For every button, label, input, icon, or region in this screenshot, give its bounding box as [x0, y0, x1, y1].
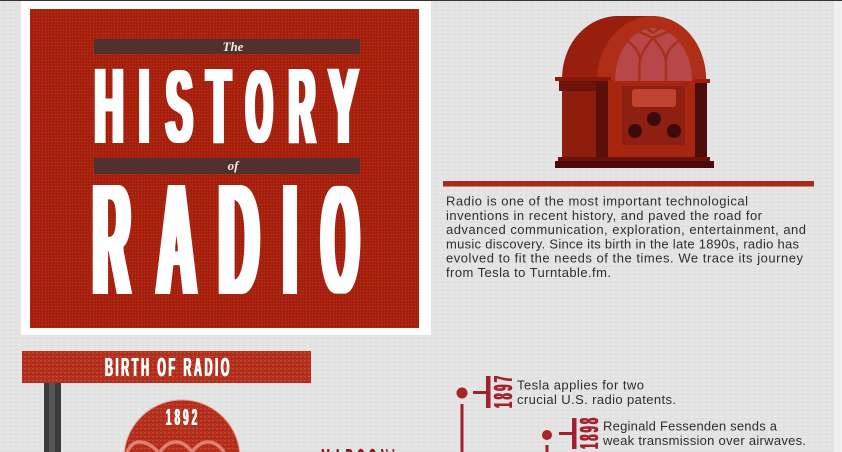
section heading: Birth of Radio	[22, 351, 311, 383]
circle: 1892: 1892	[166, 404, 197, 430]
icon: radio wave	[127, 442, 224, 452]
title word: HISTORY: I	[139, 46, 149, 166]
title bar: of	[94, 158, 360, 174]
title word: RADIO: O	[322, 152, 358, 328]
timeline event: 1897: 1897	[490, 376, 519, 408]
radio knobs	[628, 112, 681, 138]
title word: HISTORY: T	[207, 47, 230, 167]
title word: RADIO: R	[93, 147, 130, 331]
timeline event: 1898: weak transmission over airwaves.	[602, 433, 806, 448]
title bar: The	[94, 39, 360, 54]
circle: 1892	[124, 400, 240, 452]
icon: vintage cathedral radio	[555, 16, 714, 168]
title word: HISTORY: S	[166, 48, 192, 164]
timeline event: 1897	[456, 376, 676, 452]
text block: introduction: Radio is one of the most important technological	[446, 194, 748, 209]
text block: introduction: music discovery. Since its birth in the late 1890s, radio has	[446, 236, 800, 251]
title word: HISTORY: Y	[329, 47, 358, 167]
timeline event: 1898	[542, 418, 806, 452]
title bar: The: The	[223, 39, 244, 54]
text block: introduction: evolved to fit the needs of the times. We trace its journey	[446, 251, 804, 266]
timeline event: 1898: Reginald Fessenden sends a	[603, 419, 778, 434]
title word: HISTORY: R	[289, 47, 315, 167]
radio front panel	[622, 86, 685, 145]
text block: introduction: inventions in recent history, and paved the road for	[446, 208, 763, 223]
panel: title poster	[21, 1, 431, 335]
title word: HISTORY: H	[95, 48, 123, 167]
text block: introduction: from Tesla to Turntable.fm.	[446, 265, 611, 280]
title word: HISTORY: O	[246, 49, 272, 165]
section heading: Birth of Radio: BIRTH OF RADIO	[105, 354, 229, 383]
title bar: of: of	[228, 158, 240, 173]
text block: introduction: advanced communication, exploration, entertainment, and	[446, 222, 806, 237]
title word: RADIO: I	[284, 149, 296, 332]
divider bar	[443, 181, 814, 186]
timeline event: 1897: crucial U.S. radio patents.	[517, 392, 676, 407]
title word: RADIO	[93, 147, 358, 332]
signpost post	[44, 383, 61, 452]
title word: RADIO: D	[219, 147, 259, 331]
title word: RADIO: A	[157, 147, 196, 331]
timeline event: 1897: Tesla applies for two	[517, 378, 644, 392]
text block: introduction	[446, 194, 806, 280]
title word: HISTORY	[95, 46, 358, 167]
timeline event: 1898: 1898	[576, 418, 605, 449]
radio windows	[615, 28, 692, 81]
